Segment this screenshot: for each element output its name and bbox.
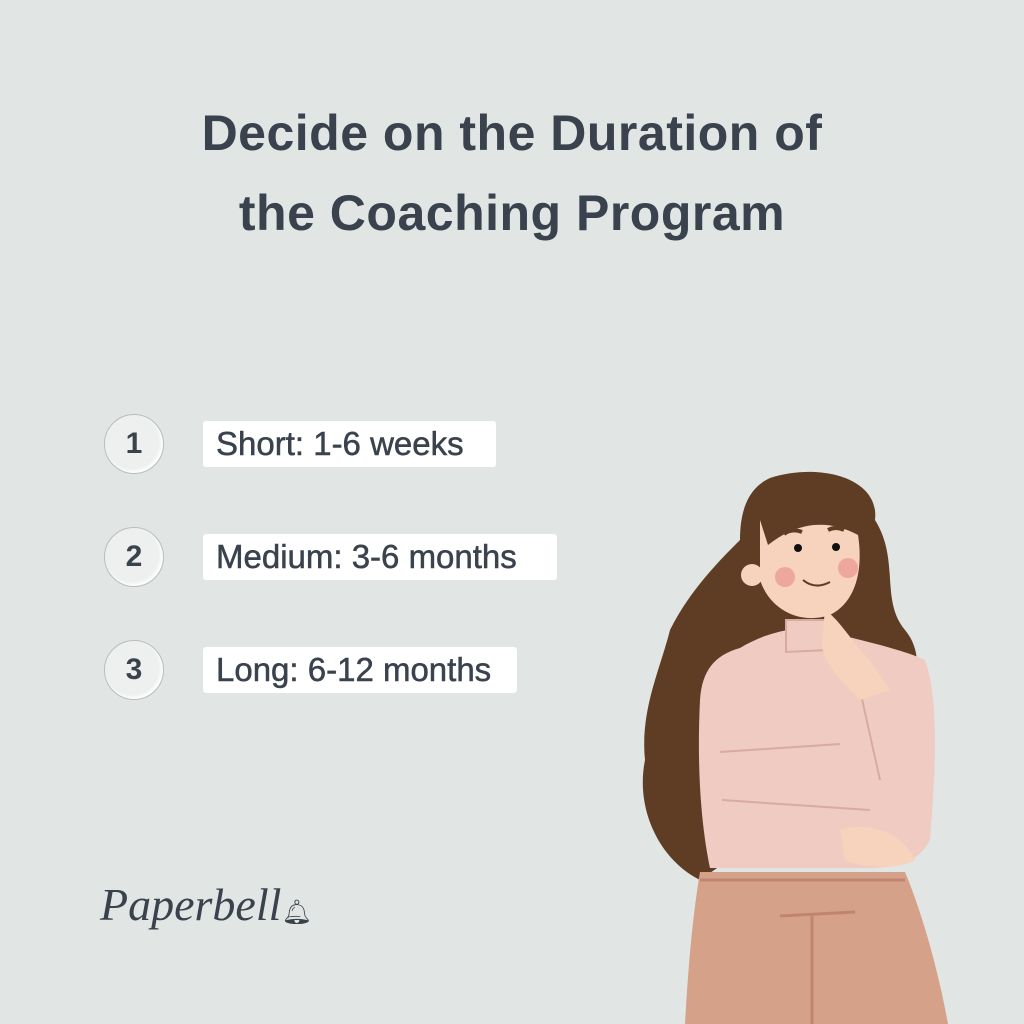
- number 2: [104, 527, 164, 587]
- label 1: Short: 1-6 weeks: [216, 425, 464, 462]
- face: [760, 509, 860, 618]
- skirt: [685, 872, 948, 1024]
- logo: Paperbell🔔︎: [100, 879, 312, 930]
- sweater: [699, 629, 935, 868]
- hair back: [643, 472, 917, 880]
- number 1: [104, 414, 164, 474]
- number 3: 3: [126, 653, 142, 686]
- label 1: [203, 421, 496, 467]
- label 3: Long: 6-12 months: [216, 651, 491, 688]
- number 1: 1: [126, 427, 142, 460]
- label 2: Medium: 3-6 months: [216, 538, 517, 575]
- number 3: [104, 640, 164, 700]
- title: Decide on the Duration of: [202, 105, 822, 161]
- number 2: 2: [126, 540, 142, 573]
- label 2: [203, 534, 557, 580]
- title: the Coaching Program: [239, 185, 785, 241]
- hand: [822, 610, 890, 700]
- title: [202, 105, 822, 241]
